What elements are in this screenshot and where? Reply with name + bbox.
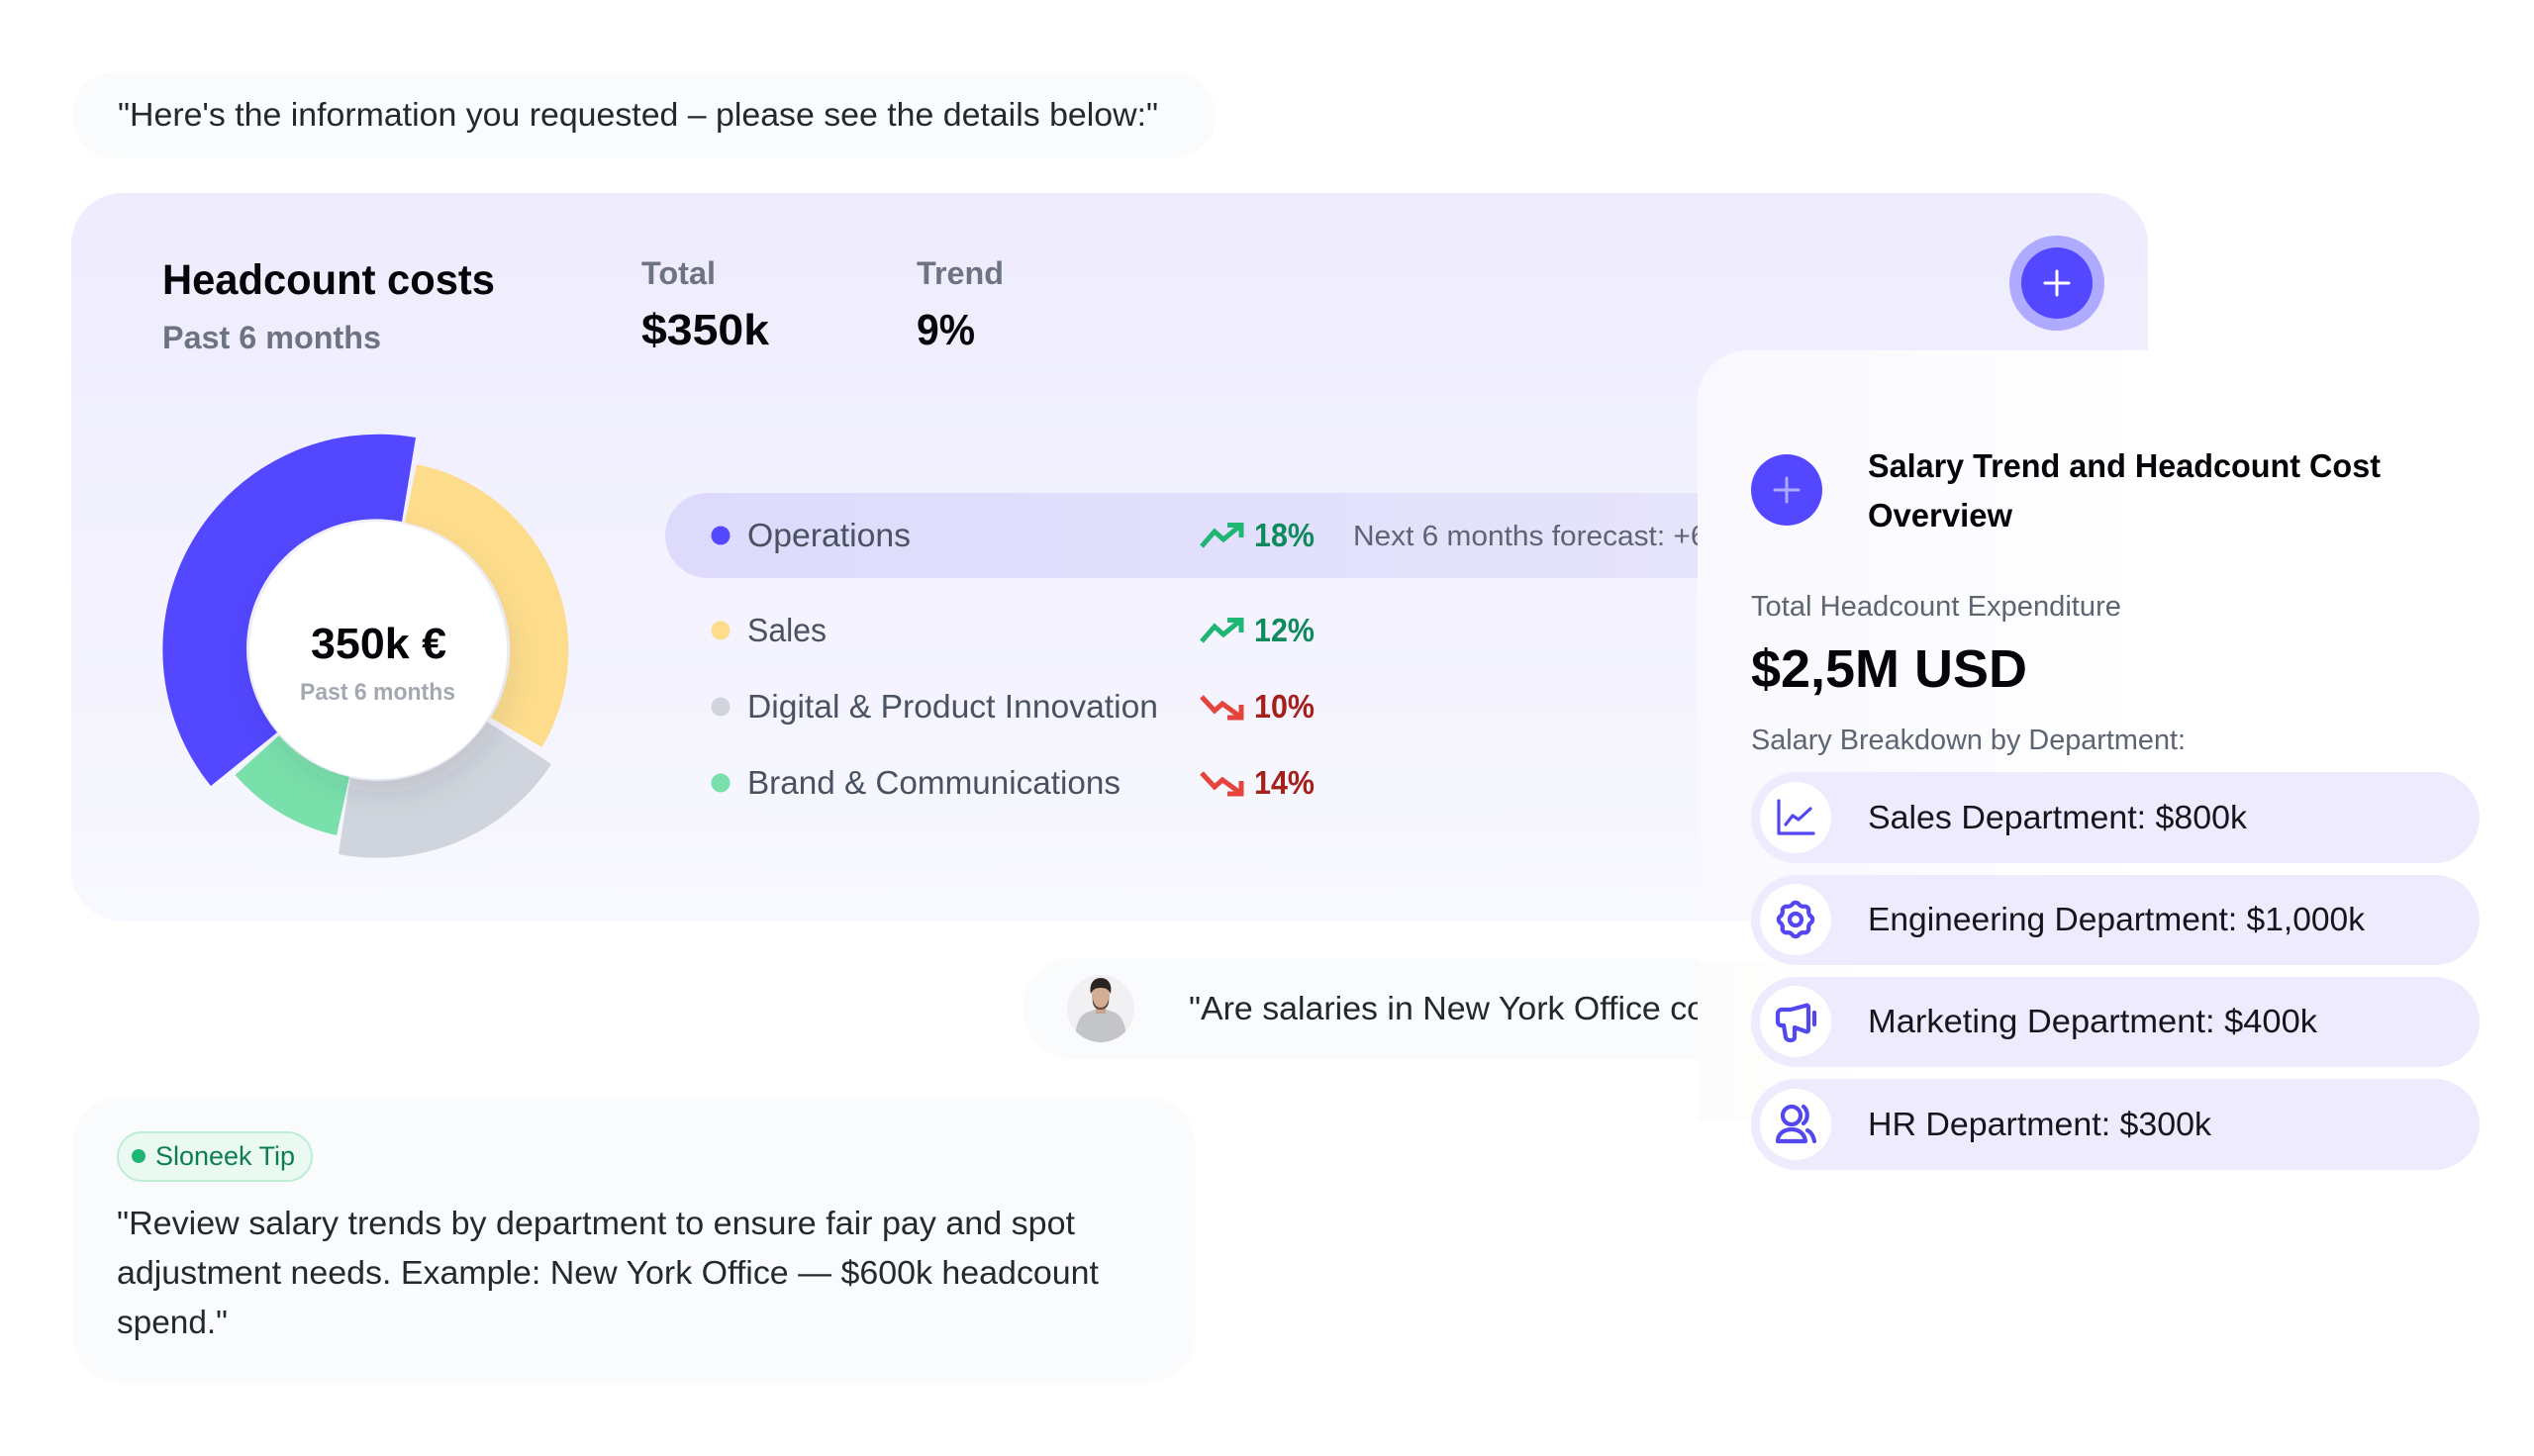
heading: headcount costs: Headcount costs — [162, 256, 495, 304]
legend row: digital and product innovation: 10% — [1254, 688, 1315, 725]
row: hr department: HR Department: $300k — [1868, 1106, 2212, 1142]
row: hr department — [1751, 1079, 2480, 1170]
badge: sloneek tip: Sloneek Tip — [155, 1141, 295, 1171]
subheading: past 6 months: Past 6 months — [162, 320, 381, 355]
stat: total expenditure: $2,5M USD — [1751, 639, 2027, 699]
legend row: sales — [711, 612, 1315, 648]
donut centre: 350k € — [311, 620, 446, 668]
stat: trend: 9% — [917, 306, 975, 354]
chat bubble: assistant intro — [72, 72, 1216, 158]
question text: "Are salaries in New York Office co — [1189, 990, 1706, 1026]
row: sales department: Sales Department: $800k — [1868, 799, 2248, 835]
stat: total — [641, 255, 770, 354]
icon: chart — [1779, 801, 1813, 833]
row: sales department — [1751, 772, 2480, 863]
heading: salary trend — [1868, 447, 2381, 534]
legend row: operations: 18% — [1254, 517, 1315, 553]
icon: add — [1751, 454, 1822, 526]
badge: sloneek tip — [118, 1132, 312, 1181]
stat: total: $350k — [641, 306, 770, 354]
row: engineering department: Engineering Department: $1,000k — [1868, 901, 2365, 937]
tip text — [117, 1205, 1099, 1340]
segment: brand and communications — [236, 735, 349, 835]
icon: people — [1778, 1107, 1814, 1141]
legend row: operations: Next 6 months forecast: +6% — [1353, 521, 1733, 552]
stat: trend — [917, 255, 1004, 354]
legend row: brand and communications — [711, 764, 1315, 801]
legend row: digital and product innovation — [711, 688, 1315, 725]
avatar — [1065, 974, 1136, 1043]
tip text: adjustment needs. Example: New York Office — $600k headcount — [117, 1254, 1099, 1291]
icon: megaphone — [1778, 1006, 1814, 1040]
stat: total: Total — [641, 255, 716, 291]
legend row: sales: 12% — [1254, 612, 1315, 648]
tip text: spend." — [117, 1304, 228, 1340]
label: salary breakdown: Salary Breakdown by Department: — [1751, 725, 2186, 756]
panel: salary overview — [1698, 350, 2534, 1203]
intro text: "Here's the information you requested – please see the details below:" — [118, 96, 1158, 133]
heading: salary trend: Overview — [1868, 497, 2012, 534]
segment: digital and product innovation — [339, 722, 551, 858]
row: marketing department: Marketing Department: $400k — [1868, 1003, 2318, 1039]
icon: gear — [1779, 903, 1812, 936]
panel: sloneek tip — [72, 1097, 1196, 1383]
tip text: "Review salary trends by department to ensure fair pay and spot — [117, 1205, 1075, 1241]
legend row: digital and product innovation: Digital & Product Innovation — [747, 688, 1158, 725]
legend row: brand and communications: 14% — [1254, 764, 1315, 801]
row: engineering department — [1751, 875, 2480, 965]
panel: headcount costs — [71, 193, 2148, 922]
segment: sales — [405, 464, 568, 747]
donut centre — [249, 522, 507, 779]
donut centre: Past 6 months — [300, 679, 455, 706]
heading: salary trend: Salary Trend and Headcount Cost — [1868, 447, 2381, 484]
donut chart — [162, 435, 568, 858]
legend row: operations: Operations — [747, 517, 911, 553]
row: marketing department — [1751, 977, 2480, 1067]
legend row: sales: Sales — [747, 612, 827, 648]
segment: operations — [162, 435, 416, 786]
legend row: brand and communications: Brand & Communications — [747, 764, 1121, 801]
label: total expenditure: Total Headcount Expenditure — [1751, 591, 2121, 623]
legend row: operations — [665, 493, 1733, 578]
chat bubble: user question — [1067, 975, 1698, 1042]
button: add — [2009, 236, 2104, 331]
stat: trend: Trend — [917, 255, 1004, 291]
